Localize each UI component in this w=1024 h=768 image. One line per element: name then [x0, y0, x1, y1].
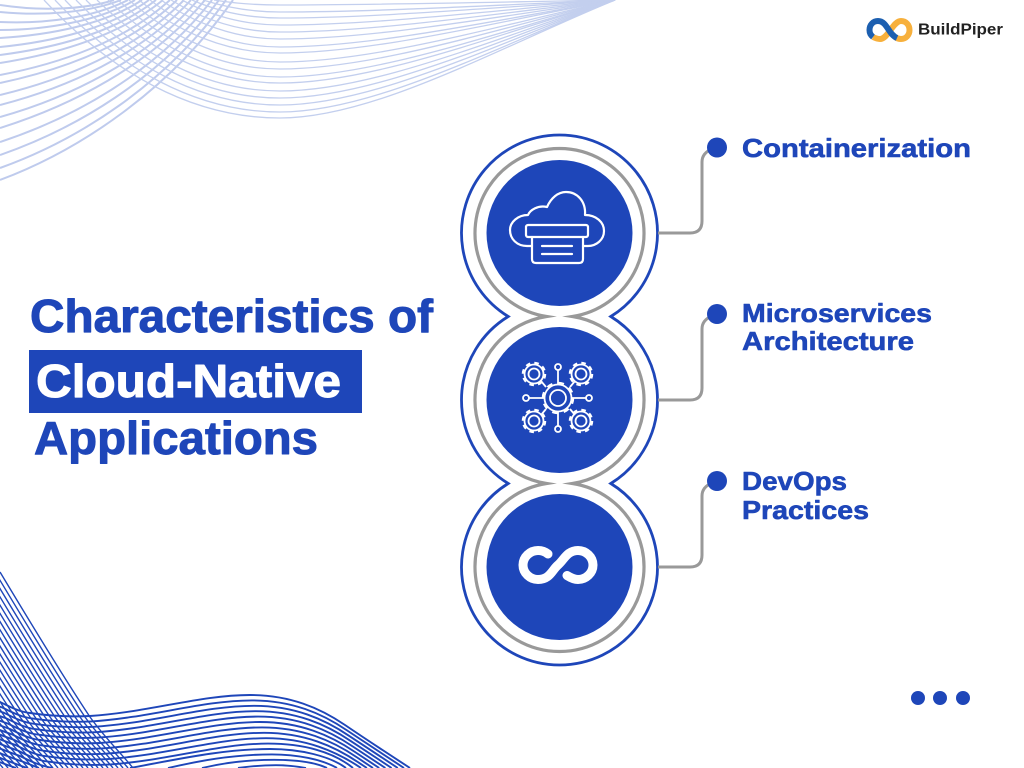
label 3 line 2: Practices: [742, 495, 869, 525]
panel: container circle: [486, 160, 632, 306]
blue disc: [486, 160, 632, 306]
connector arrow 3: [658, 483, 712, 567]
logo wordmark: BuildPiper: [918, 22, 1003, 38]
title block: [29, 290, 434, 464]
bullet dot 1: [707, 138, 727, 158]
title line 3: Applications: [34, 412, 318, 464]
connected rings outline: [462, 135, 658, 665]
connector arrow 2: [658, 316, 712, 400]
outer blue outline: [462, 135, 658, 665]
icon: gear network: [523, 363, 592, 432]
title highlight bar: [29, 350, 362, 413]
item: DevOps Practices: [658, 466, 869, 567]
pagination dots: [911, 691, 970, 705]
icon: cloud with box: [510, 192, 604, 263]
panel: devops circle: [486, 494, 632, 640]
bullet dot 3: [707, 471, 727, 491]
inner gray outline: [475, 149, 644, 651]
icon: infinity loop: [523, 550, 593, 580]
label 3 line 1: DevOps: [742, 466, 847, 496]
connector arrow 1: [658, 149, 712, 233]
title line 1: Characteristics of: [30, 290, 434, 342]
panel: microservices circle: [486, 327, 632, 473]
label 2 line 1: Microservices: [742, 298, 932, 328]
blue disc: [486, 327, 632, 473]
bullet dot 2: [707, 304, 727, 324]
blue disc: [486, 494, 632, 640]
title line 2: Cloud-Native: [36, 355, 341, 407]
logo: BuildPiper: [870, 21, 1003, 39]
item: Microservices Architecture: [658, 298, 932, 400]
item: Containerization: [658, 133, 971, 233]
label 1: Containerization: [742, 133, 971, 163]
label 2 line 2: Architecture: [742, 326, 914, 356]
icon: logo infinity mark: [870, 21, 910, 39]
